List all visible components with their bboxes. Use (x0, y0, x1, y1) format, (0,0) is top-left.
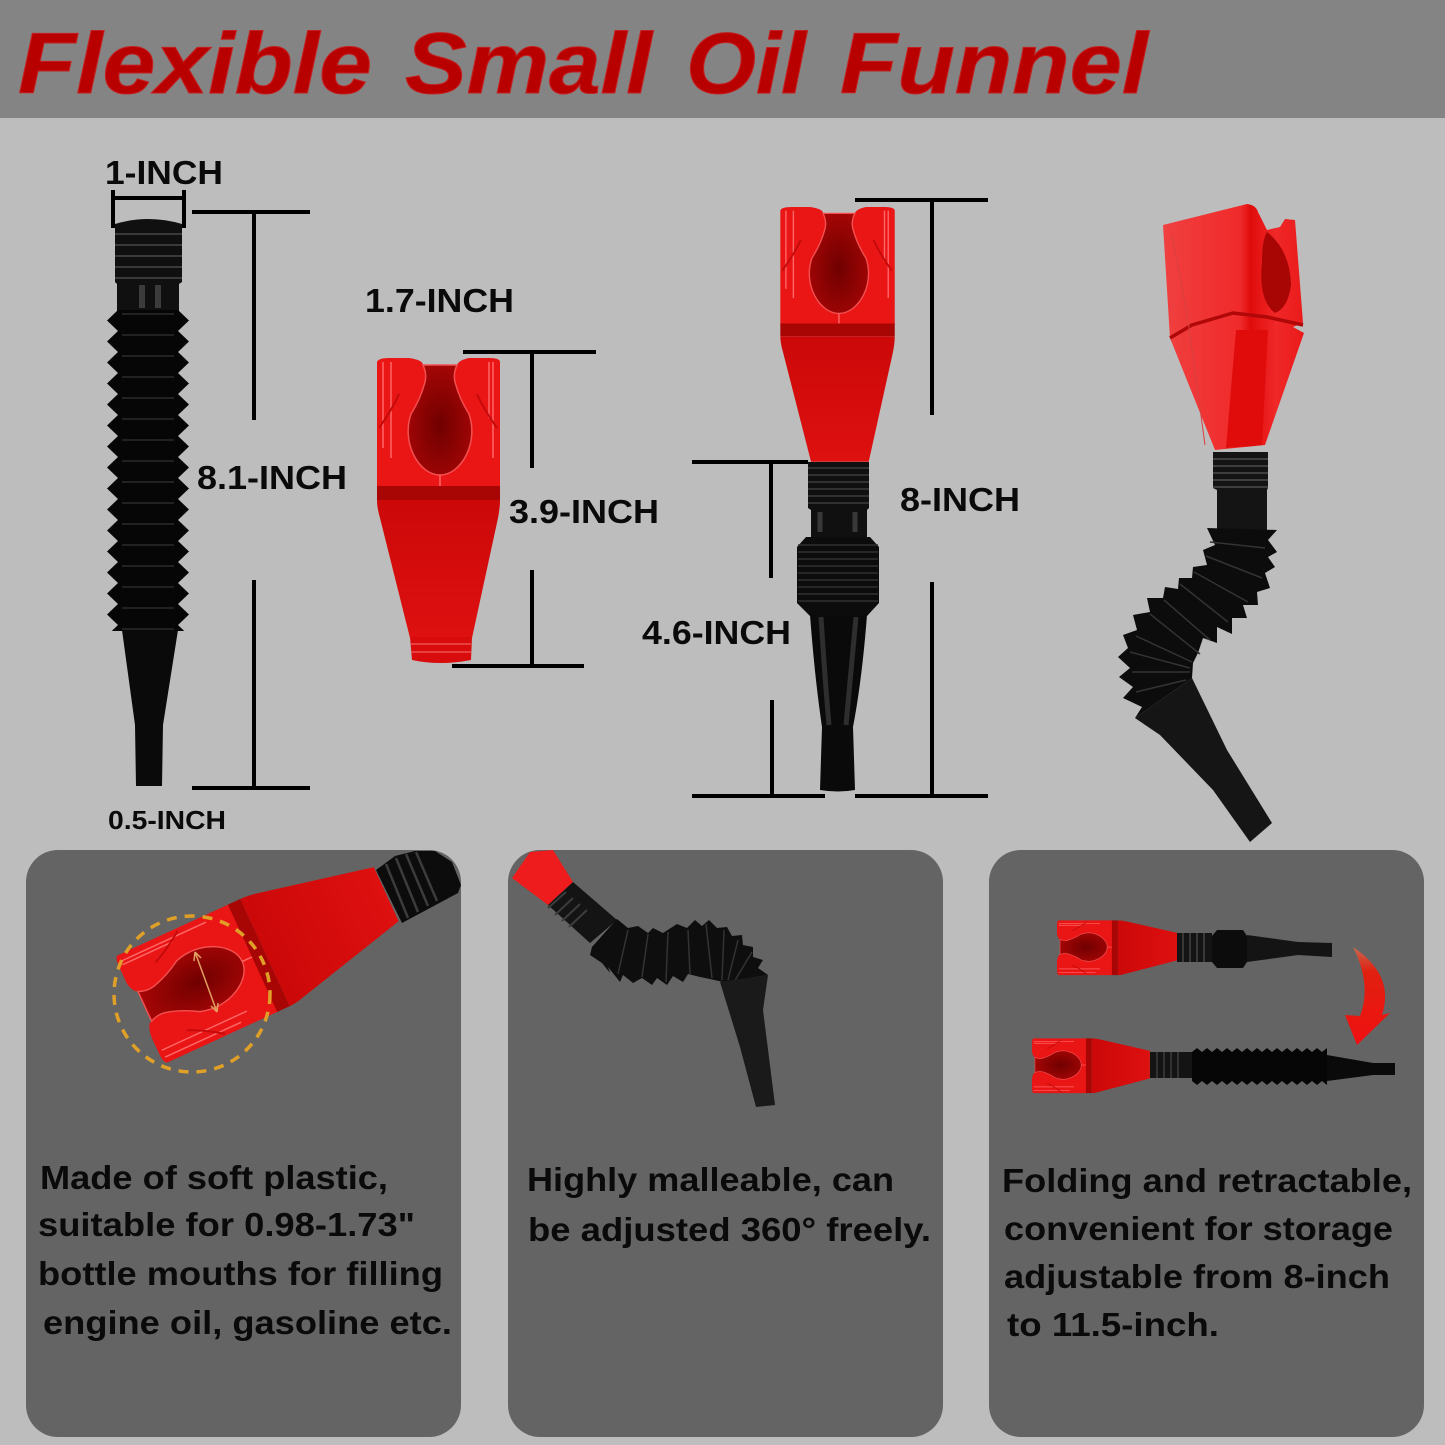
description text: suitable for 0.98-1.73" (38, 1206, 415, 1243)
dimension: 8-inch (855, 200, 988, 796)
label: 0.5-inch: 0.5-INCH (108, 805, 226, 835)
assembled tip (810, 615, 867, 792)
description text: bottle mouths for filling (38, 1255, 443, 1292)
spout bellows (106, 310, 190, 631)
dashed circle callout (114, 916, 270, 1072)
label: 8.1-inch: 8.1-INCH (197, 459, 347, 496)
title: Small (405, 16, 654, 112)
assembled threads (808, 462, 869, 537)
extended funnel illustration (1032, 1038, 1395, 1093)
assembled funnel with dimensions (642, 200, 1020, 796)
dimension: 3.9-inch (452, 352, 596, 666)
label: 8-inch: 8-INCH (900, 481, 1020, 518)
bent funnel threads (1213, 452, 1268, 532)
description text: to 11.5-inch. (1007, 1306, 1219, 1343)
curved red arrow (1345, 947, 1390, 1045)
funnel head (377, 358, 500, 663)
description text: be adjusted 360° freely. (528, 1211, 931, 1248)
bent funnel tip (1135, 678, 1272, 842)
bent spout illustration (512, 850, 775, 1107)
panel: malleable (508, 850, 943, 1437)
black spout with dimensions (105, 154, 347, 835)
description text: Made of soft plastic, (40, 1159, 388, 1196)
spout threaded top (115, 219, 182, 312)
bent funnel bellows (1118, 528, 1277, 718)
red funnel head with dimensions (365, 282, 659, 666)
description text (38, 1159, 452, 1341)
description text: convenient for storage (1004, 1210, 1393, 1247)
dimension: 4.6-inch (692, 462, 825, 796)
label: 1-inch: 1-INCH (105, 154, 223, 191)
description text: Highly malleable, can (527, 1161, 894, 1198)
header band (0, 0, 1445, 118)
dimension: 8.1-inch (192, 212, 310, 788)
description text: Folding and retractable, (1002, 1162, 1412, 1199)
label: 1.7-inch: 1.7-INCH (365, 282, 514, 319)
diameter arrow (194, 952, 218, 1012)
title (18, 16, 1150, 112)
bent funnel (1118, 204, 1304, 842)
description text: engine oil, gasoline etc. (43, 1304, 452, 1341)
panel: retractable (989, 850, 1424, 1437)
label: 4.6-inch: 4.6-INCH (642, 614, 791, 651)
bent funnel head (1163, 204, 1304, 450)
funnel mouth illustration (115, 843, 461, 1064)
title: Flexible (18, 16, 372, 112)
description text: adjustable from 8-inch (1004, 1258, 1390, 1295)
bracket: 1-inch (113, 190, 184, 228)
assembled funnel head (780, 207, 895, 462)
description text (527, 1161, 931, 1248)
panel: soft plastic (26, 843, 461, 1437)
panel background (989, 850, 1424, 1437)
panel background (26, 850, 461, 1437)
panel background (508, 850, 943, 1437)
assembled collar (797, 537, 879, 616)
label: 3.9-inch: 3.9-INCH (509, 493, 659, 530)
title: Funnel (840, 16, 1150, 112)
description text (1002, 1162, 1412, 1343)
spout tip (122, 630, 178, 786)
title: Oil (686, 16, 808, 112)
short funnel illustration (1057, 920, 1332, 975)
